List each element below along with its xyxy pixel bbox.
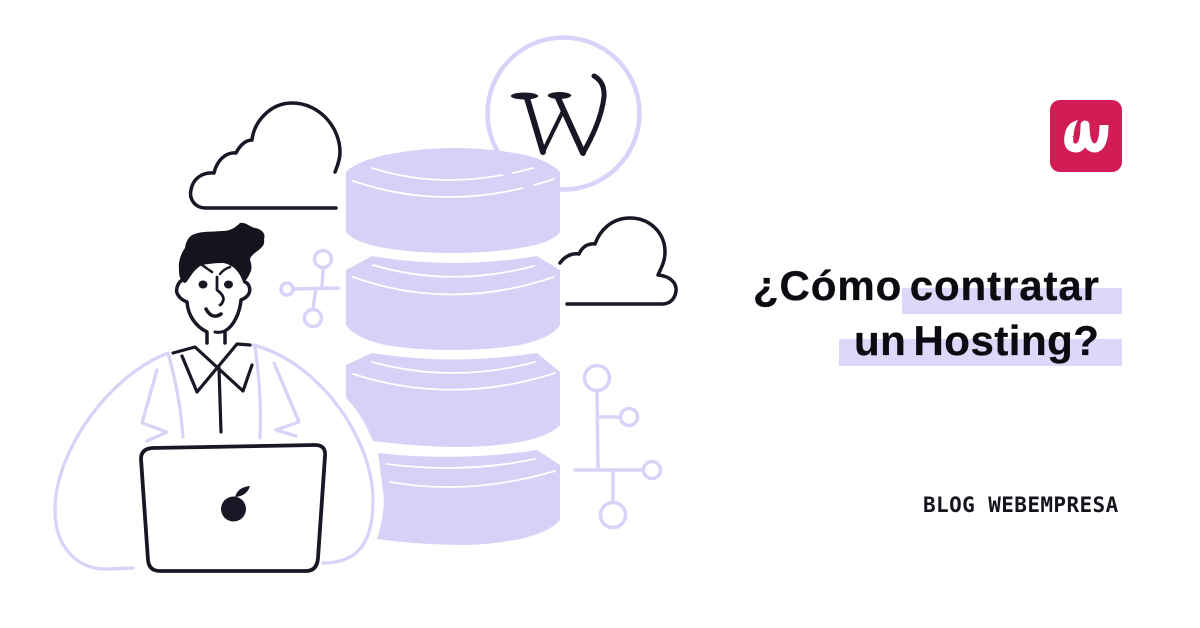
disk 3 [346,353,560,447]
icon: apple logo [221,486,250,522]
icon: WordPress circle [488,38,640,190]
shirt collar [173,344,252,432]
laptop [141,445,325,571]
icon: left node connector [281,250,338,326]
icon: right node connector [575,366,660,528]
title highlight: second line [839,339,1122,366]
face [177,265,250,343]
disk 4 [377,450,560,545]
hair [179,223,265,283]
title line 1: ¿Cómo contratar [753,262,1100,309]
blog label: BLOG WEBEMPRESA [923,493,1119,517]
disk 2 [346,256,560,350]
white halo behind arm [253,345,373,563]
icon: W letter mark [511,76,604,153]
icon: left cloud [191,103,340,208]
body outline [55,345,373,569]
person [55,223,373,571]
disk 1 [346,148,560,253]
title line 2: un Hosting? [854,317,1099,364]
database stack [346,148,560,545]
title highlight: first line [902,288,1122,314]
icon: right cloud [560,218,676,304]
logo: Webempresa badge [1050,100,1122,172]
